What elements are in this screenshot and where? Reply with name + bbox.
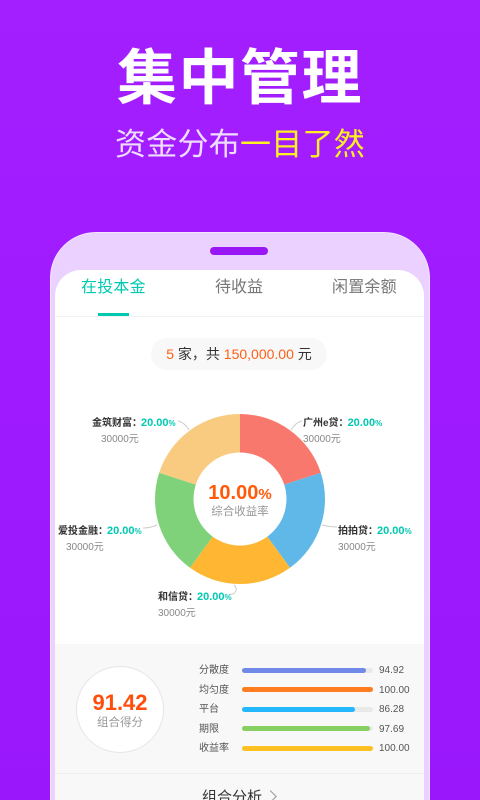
chevron arrow [264, 790, 277, 800]
leader lines [143, 420, 337, 596]
metric: 期限 [199, 724, 404, 735]
label: 和信贷: 30000元 [158, 608, 196, 619]
score label: 组合得分 [97, 717, 143, 729]
label: 拍拍贷: 30000元 [338, 542, 376, 553]
speaker slot [210, 247, 268, 255]
label: 拍拍贷: 拍拍贷：20.00% [338, 525, 412, 537]
metric: 平台: 86.28 [379, 704, 404, 715]
score panel [55, 644, 424, 800]
center value: 10.00% [208, 482, 272, 504]
label: 爱投金融: 30000元 [66, 542, 104, 553]
label: 金筑财富: 金筑财富：20.00% [92, 417, 176, 429]
label: 和信贷: 和信贷：20.00% [158, 591, 232, 603]
phone frame [50, 232, 430, 800]
metric: 均匀度 [199, 684, 410, 696]
metric: 期限: 期限 [199, 724, 219, 735]
score value: 91.42 [92, 690, 148, 715]
donut chart [155, 414, 325, 584]
metric: 均匀度: 均匀度 [199, 685, 229, 696]
label: 广州e贷 [303, 417, 382, 445]
metric: 期限: 97.69 [379, 724, 404, 735]
segment: 金筑财富 [159, 414, 240, 485]
tab: pending returns: 待收益 [215, 279, 263, 296]
segment: 爱投金融 [155, 473, 213, 568]
metric: 收益率: 100.00 [379, 743, 410, 754]
tab: active: 在投本金 [81, 279, 146, 296]
divider and link row [55, 773, 424, 800]
metric: 分散度: 分散度 [199, 665, 229, 676]
app screen panel [55, 270, 424, 800]
label: 爱投金融 [58, 525, 142, 553]
metric: 平台 [199, 703, 404, 715]
metric: 平台: 平台 [199, 704, 219, 715]
metric: 均匀度: 100.00 [379, 685, 410, 696]
metric: 分散度: 94.92 [379, 665, 404, 676]
segment: 和信贷 [190, 537, 290, 584]
center label: 综合收益率 [211, 506, 269, 518]
label: 金筑财富: 30000元 [101, 434, 139, 445]
segment: 广州e贷 [240, 414, 321, 485]
metric: 收益率 [199, 742, 410, 754]
subtitle: 资金分布一目了然 [115, 127, 365, 162]
label: 爱投金融: 爱投金融：20.00% [58, 525, 142, 537]
title: 集中管理 [117, 45, 363, 112]
summary pill [151, 338, 327, 370]
summary pill: 5 家，共 150,000.00 元 [166, 346, 312, 362]
label: 金筑财富 [92, 416, 176, 445]
active tab underline [98, 313, 129, 316]
label: 和信贷 [158, 591, 232, 619]
segment: 拍拍贷 [267, 473, 325, 568]
tab bar [55, 270, 424, 317]
label: 广州e贷: 广州e贷：20.00% [303, 417, 382, 429]
metric: 收益率: 收益率 [199, 743, 229, 754]
tab: idle balance: 闲置余额 [332, 279, 397, 296]
metric: 分散度 [199, 664, 404, 676]
label: 拍拍贷 [338, 525, 412, 553]
label: 广州e贷: 30000元 [303, 434, 341, 445]
score circle [76, 666, 164, 753]
metric bars [199, 664, 410, 754]
